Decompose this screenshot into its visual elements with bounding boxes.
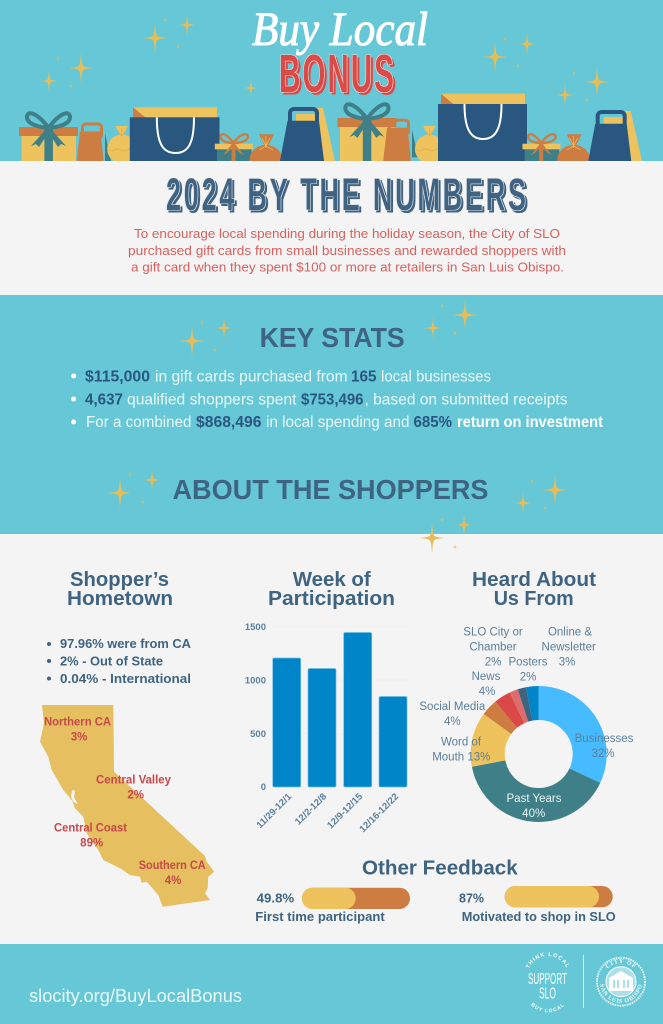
heading: shopper's hometown: Hometown [67,587,173,610]
illustration: row of gifts and shopping bags [19,94,642,161]
stats list: $868,496 [196,414,262,431]
logo: support SLO: SLO [539,986,556,1002]
map labels: Central Coast [54,823,127,835]
panel: heard about us from [419,568,634,820]
heading: week of participation [268,568,395,610]
map labels: Northern CA [44,717,111,729]
origin list: 97.96% were from CA [60,636,192,651]
panel: key stats [0,295,663,534]
feedback: motivated to shop in SLO [459,886,616,924]
stats list: qualified shoppers spent [127,391,297,408]
map labels: 89% [80,838,103,850]
heading: about the shoppers: ABOUT THE SHOPPERS [172,474,488,505]
feedback: first time participant: First time participant [255,909,385,924]
y axis labels [245,622,266,793]
y axis labels: 1500 [245,622,266,633]
x axis labels: 12/2-12/8 [293,791,329,828]
panel: shopper details background [0,534,663,944]
donut labels: Social Media [419,701,486,713]
donut labels: SLO City or [463,627,523,639]
donut chart [488,703,590,805]
logo: support SLO: SUPPORT [528,971,567,988]
stats list [71,369,603,431]
heading: 2024 by the numbers: 2024 BY THE NUMBERS [166,169,526,220]
y axis labels: 1000 [245,676,266,686]
feedback: first time participant [255,888,410,924]
key stats sparkles [179,298,478,358]
donut labels: Posters [508,657,548,669]
heading: shopper's hometown: Shopper’s [70,568,169,591]
feedback: motivated to shop in SLO: 87% [459,891,484,906]
panel: intro [0,161,663,295]
map labels: 2% [127,790,144,802]
map labels [44,717,206,887]
map labels: Central Valley [96,775,172,787]
intro paragraph: a gift card when they spent $100 or more at retailers in San Luis Obispo. [131,260,564,274]
logo: support SLO: THINK LOCAL [526,952,569,968]
panel: week of participation [245,568,408,835]
donut labels: 2% [520,672,536,684]
about the shoppers sparkles [107,468,568,515]
donut labels: 40% [522,808,545,820]
map of California [40,705,214,907]
logo: support SLO [526,952,569,1012]
origin list [47,636,192,686]
logo: city seal [596,956,646,1007]
stats list: 4,637 [85,391,123,408]
stats list: $115,000 [85,369,150,386]
donut labels: 2% [485,656,501,668]
stats list: For a combined [86,414,192,431]
x axis labels: 12/16-12/22 [357,791,401,835]
logo: city seal: CITY OF [606,959,636,968]
heading: other feedback: Other Feedback [362,856,518,879]
heading: key stats: KEY STATS [260,322,405,353]
heading: heard about us from: Heard About [472,568,596,591]
stats list: $753,496 [301,391,364,408]
heading: shopper's hometown [67,568,173,610]
bar chart [245,622,408,835]
title: Buy Local: Buy Local [252,3,428,56]
panel: shopper's hometown [40,568,214,907]
stats list: in local spending and [266,414,410,431]
feedback: first time participant: 49.8% [257,891,295,906]
donut labels: Mouth 13% [432,752,490,764]
donut labels: Businesses [575,733,634,745]
donut labels: Online & [548,627,592,639]
title: Bonus: BONUS [279,45,394,104]
y axis labels: 0 [261,782,266,793]
y axis labels: 500 [250,729,266,740]
stats list: , based on submitted receipts [364,391,568,408]
donut labels: 3% [559,656,575,668]
x axis labels [255,791,401,835]
panel: other feedback [255,856,616,924]
origin list: 0.04% - International [60,671,191,686]
donut labels: Chamber [469,642,517,654]
stats list: 685% [414,414,452,431]
header sparkles [40,13,610,107]
logo: support SLO: BUY LOCAL [531,1002,564,1012]
header banner [0,0,663,177]
intro paragraph: purchased gift cards from small businesses and rewarded shoppers with [128,244,566,258]
feedback: motivated to shop in SLO: Motivated to shop in SLO [462,909,616,924]
footer [0,944,663,1024]
donut labels: 4% [444,716,461,728]
stats list: local businesses [381,369,491,386]
map labels: Southern CA [139,860,206,872]
heading: heard about us from: Us From [494,587,574,610]
intro paragraph: To encourage local spending during the holiday season, the City of SLO [134,227,560,241]
logo divider [583,955,584,1008]
donut labels [419,627,634,820]
map labels: 4% [165,875,181,887]
origin list: 2% - Out of State [60,654,163,668]
heading: week of participation: Week of [293,568,371,591]
heading: heard about us from [472,568,596,610]
website link: slocity.org/BuyLocalBonus [29,986,242,1006]
map labels: 3% [71,732,87,744]
donut labels: Newsletter [542,642,596,654]
bars [273,632,407,787]
donut labels: 4% [479,686,495,698]
sparkles at section edge [419,513,473,554]
stats list: return on investment [457,414,603,431]
donut labels: 32% [591,748,615,760]
donut labels: News [472,671,501,683]
heading: week of participation: Participation [268,587,395,610]
intro paragraph [128,227,566,274]
logo: city seal: SAN LUIS OBISPO [600,984,642,1004]
stats list: 165 [351,369,377,386]
stats list: in gift cards purchased from [155,369,348,386]
x axis labels: 11/29-12/1 [255,791,295,831]
x axis labels: 12/9-12/15 [325,791,366,831]
donut labels: Word of [441,737,482,749]
donut labels: Past Years [507,793,562,805]
